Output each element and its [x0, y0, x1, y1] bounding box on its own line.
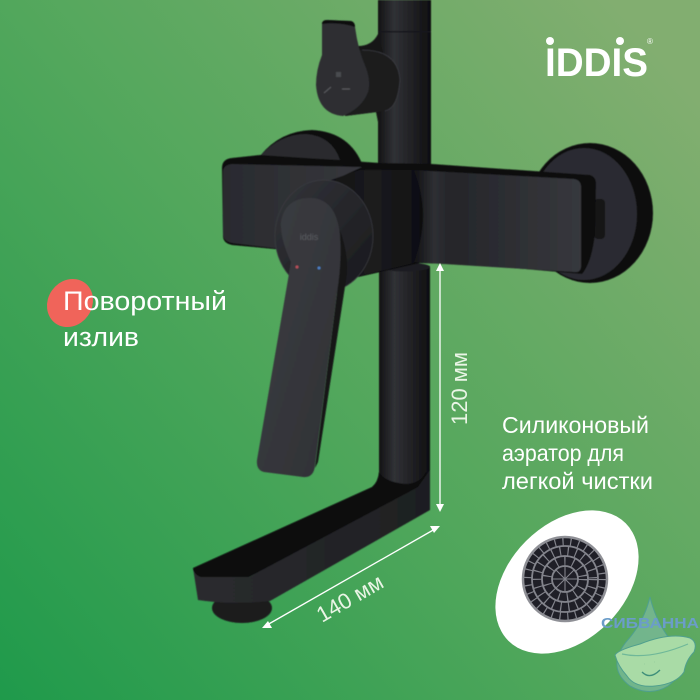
aerator outlet [212, 593, 272, 623]
handle logo: iddis [300, 232, 319, 242]
label: 140 mm: 140 мм [312, 569, 388, 627]
body right face [412, 170, 581, 272]
left wall rosette [260, 130, 363, 166]
watermark name: СИБВАННА [601, 616, 700, 632]
heading: swivel spout [63, 286, 227, 352]
red accent circle [38, 270, 102, 336]
watermark bath [615, 636, 695, 686]
heading: swivel spout: излив [63, 322, 139, 352]
watermark drop [617, 597, 681, 692]
watermark bath face [642, 662, 660, 676]
watermark bath rim [622, 644, 688, 656]
mixer body [222, 155, 596, 292]
text: silicone aerator: аэратор для [502, 440, 624, 466]
cold marker [318, 266, 320, 270]
diverter valve [316, 20, 400, 122]
rail pipe [378, 0, 431, 168]
spout vertical tube [379, 266, 430, 496]
mixer handle [257, 198, 347, 477]
brand logo: ® [647, 37, 653, 46]
hot marker [296, 266, 298, 268]
text: silicone aerator [502, 412, 653, 494]
label: 120 mm: 120 мм [447, 352, 472, 425]
brand logo: IDDIS [545, 41, 648, 85]
spout [193, 262, 430, 623]
spout top face [193, 472, 428, 577]
watermark [601, 597, 700, 692]
handle ring [275, 180, 373, 292]
hub cylinder [325, 170, 423, 278]
aerator photo [467, 482, 667, 682]
right wall rosette [527, 143, 653, 283]
horizontal dimension arrow [262, 526, 440, 628]
faucet fixture [193, 0, 653, 623]
body left face [223, 164, 362, 249]
heading: swivel spout: Поворотный [63, 286, 227, 316]
text: silicone aerator: Силиконовый [502, 412, 649, 438]
text: silicone aerator: легкой чистки [502, 468, 653, 494]
vertical dimension arrow [436, 263, 444, 512]
spout front face [193, 470, 430, 603]
